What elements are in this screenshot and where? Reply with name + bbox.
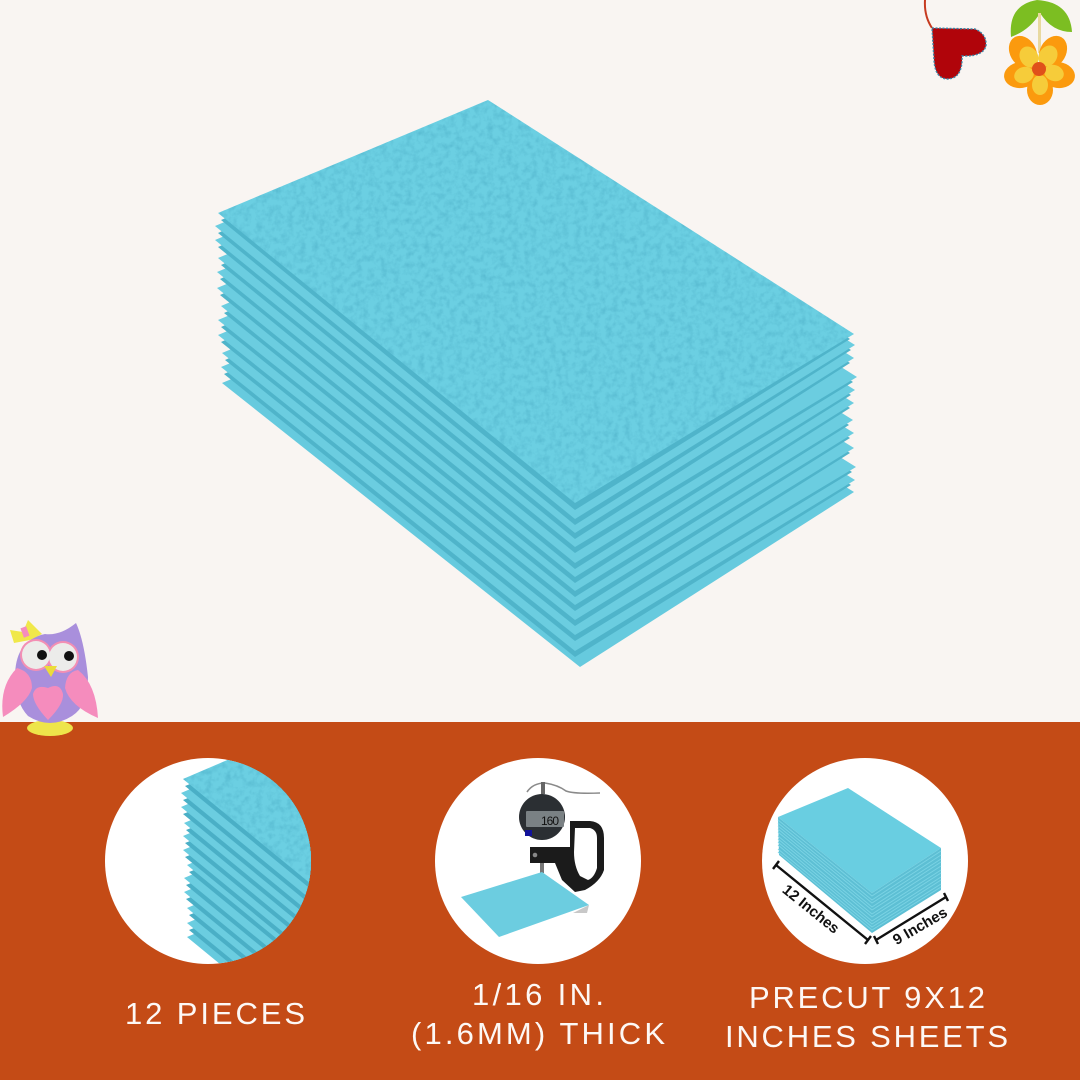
circle: thickness gauge: [435, 758, 641, 964]
icon: felt heart ornament: [925, 0, 986, 79]
top sheet: [218, 100, 854, 503]
gauge screen: [526, 811, 564, 827]
felt swatch: [573, 905, 589, 913]
label: precut size: INCHES SHEETS: [725, 1019, 1008, 1054]
gauge reading: 160: [541, 814, 559, 828]
orange panel: [0, 722, 1080, 1080]
label: precut size: PRECUT 9X12: [749, 980, 985, 1015]
gauge dial: [519, 794, 565, 840]
gauge frame: [527, 782, 604, 892]
dimension: 9 inches: [874, 893, 950, 949]
icon: felt flower: [1002, 0, 1077, 105]
mini stack: [778, 788, 941, 933]
label: thickness: 1/16 IN.: [472, 977, 604, 1012]
label: precut size: [725, 980, 1008, 1054]
label: thickness: [411, 977, 665, 1051]
product: stack of 12 felt sheets: [215, 100, 857, 667]
circle: dimensions: [762, 758, 968, 964]
circle: 12 pieces: [105, 758, 311, 964]
dimension: 12 inches: 12 Inches: [779, 881, 842, 937]
label: thickness: (1.6MM) THICK: [411, 1016, 665, 1051]
icon: felt owl: [2, 620, 98, 736]
dimension: 12 inches: [773, 861, 871, 944]
dimension: 9 inches: 9 Inches: [890, 904, 950, 949]
label: 12 pieces: 12 PIECES: [125, 996, 305, 1031]
